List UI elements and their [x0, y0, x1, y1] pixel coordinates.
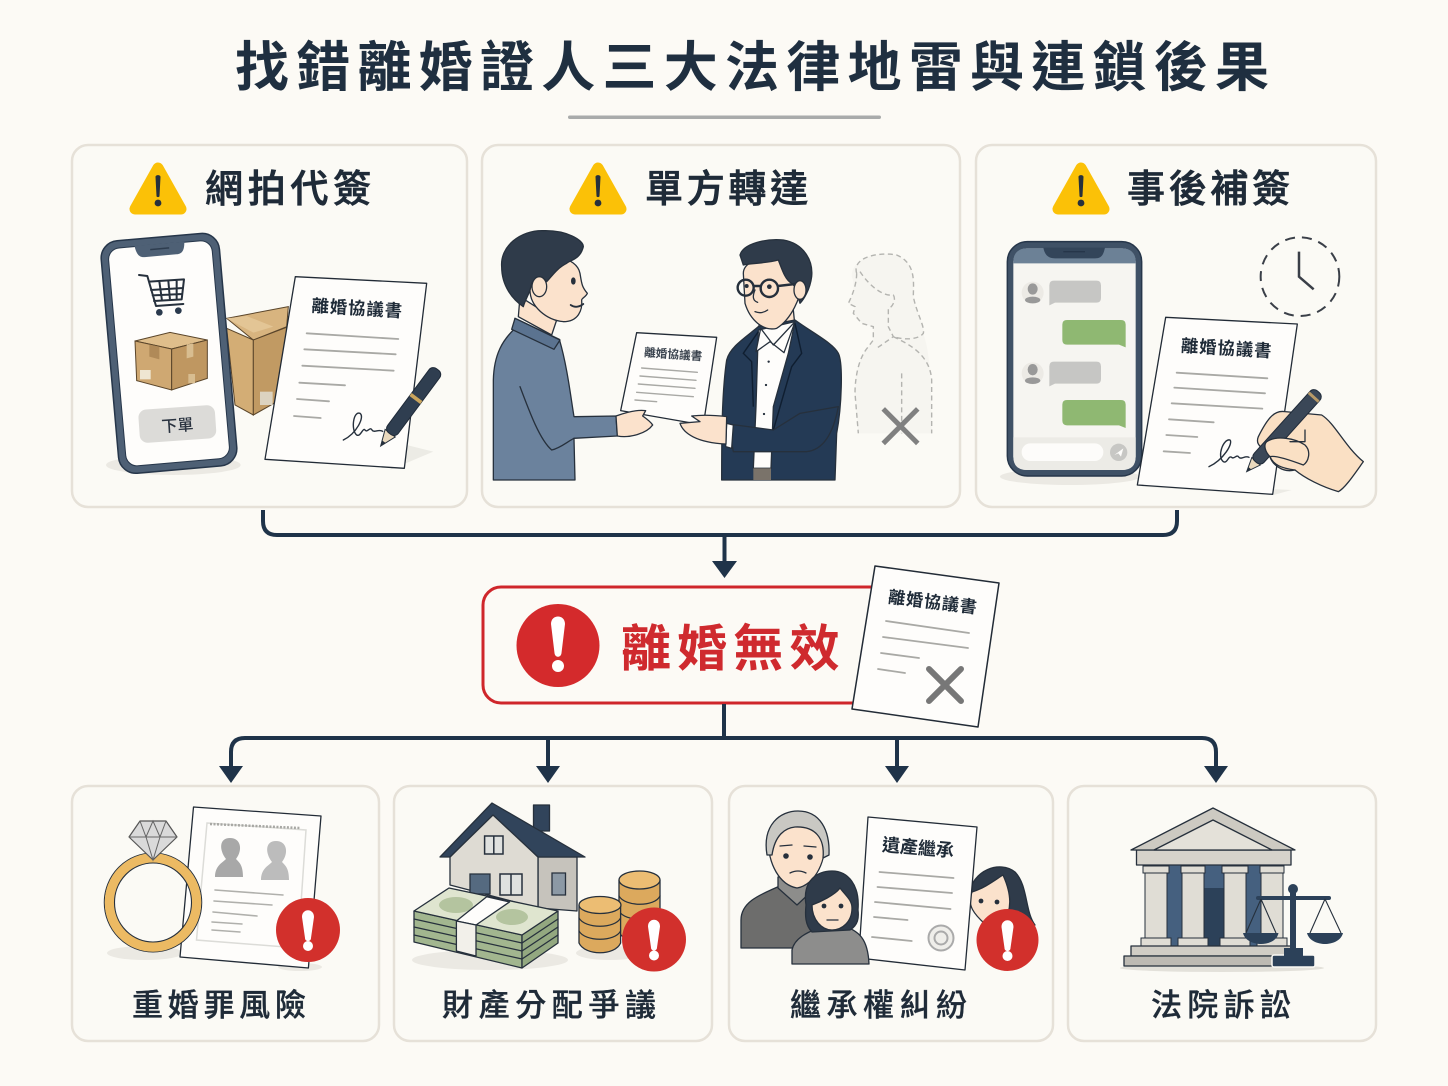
absent spouse ghost	[848, 254, 932, 442]
right relative	[969, 867, 1035, 925]
panel: 繼承權糾紛	[729, 786, 1053, 1041]
button: 下單: 下單	[161, 417, 194, 436]
contract: 離婚協議書	[311, 296, 404, 321]
illustration: phone, parcel, contract and pen	[100, 232, 443, 475]
void agreement	[852, 566, 999, 727]
heading: 事後補簽	[1127, 169, 1294, 211]
girl	[792, 871, 869, 964]
result text: 離婚無效	[621, 621, 846, 677]
arrow: three causes converge	[263, 510, 1177, 578]
late-signed agreement	[1137, 317, 1297, 495]
panel: 財產分配爭議	[394, 786, 712, 1041]
illustration: ring and marriage certificate	[104, 807, 340, 971]
label: 重婚罪風險	[132, 988, 311, 1023]
illustration: chat phone, clock, late signing	[1000, 237, 1363, 495]
label: 法院訴訟	[1151, 988, 1296, 1023]
heading: 網拍代簽	[205, 169, 376, 211]
arrow: consequences branch	[219, 704, 1228, 783]
illustration: courthouse and scales	[1120, 808, 1343, 972]
icon: warning triangle	[1058, 168, 1104, 209]
panel: 重婚罪風險	[72, 786, 379, 1041]
illustration: family and inheritance document	[741, 811, 1038, 971]
right man	[722, 240, 841, 480]
icon: pen	[375, 365, 443, 450]
marriage certificate	[180, 807, 321, 968]
callout: 離婚無效	[483, 566, 999, 727]
heading: 單方轉達	[645, 169, 812, 211]
inheritance document: 遺產繼承	[881, 834, 955, 861]
illustration: house, cash and coins	[412, 803, 686, 972]
button: 下單	[138, 405, 217, 443]
icon: house	[440, 803, 585, 911]
phone	[100, 232, 238, 475]
title: 找錯離婚證人三大法律地雷與連鎖後果	[235, 38, 1276, 98]
illustration: handing over the agreement	[493, 231, 932, 480]
panel: 法院訴訟	[1068, 786, 1376, 1041]
label: 財產分配爭議	[442, 988, 662, 1023]
icon: hand holding pen	[1242, 387, 1363, 492]
icon: red alert	[976, 909, 1038, 971]
old man	[741, 811, 830, 948]
icon: red alert	[622, 908, 686, 972]
icon: dashed clock	[1261, 237, 1339, 316]
icon: scales of justice	[1243, 884, 1343, 967]
icon: coin stacks	[579, 871, 660, 953]
large parcel	[227, 307, 288, 415]
panel: 網拍代簽	[72, 145, 467, 507]
courthouse	[1124, 808, 1300, 966]
icon: red alert	[276, 898, 340, 962]
late-signed agreement: 離婚協議書	[1180, 336, 1273, 361]
label: 繼承權糾紛	[790, 988, 972, 1023]
inheritance document	[859, 817, 977, 970]
icon: warning triangle	[575, 168, 621, 209]
chat phone	[1007, 242, 1142, 476]
icon: cart	[139, 275, 184, 316]
icon: diamond ring	[104, 821, 202, 952]
icon: small parcel	[135, 332, 207, 390]
handed agreement with hands	[616, 333, 727, 444]
contract	[265, 277, 427, 468]
left man	[493, 231, 617, 480]
icon: banknotes	[414, 888, 558, 968]
panel: 事後補簽	[976, 145, 1376, 507]
icon: red alert	[516, 604, 600, 687]
void agreement: 離婚協議書	[887, 587, 979, 617]
panel: 單方轉達	[482, 145, 960, 507]
icon: warning triangle	[135, 168, 181, 209]
handed agreement with hands: 離婚協議書	[644, 345, 703, 363]
